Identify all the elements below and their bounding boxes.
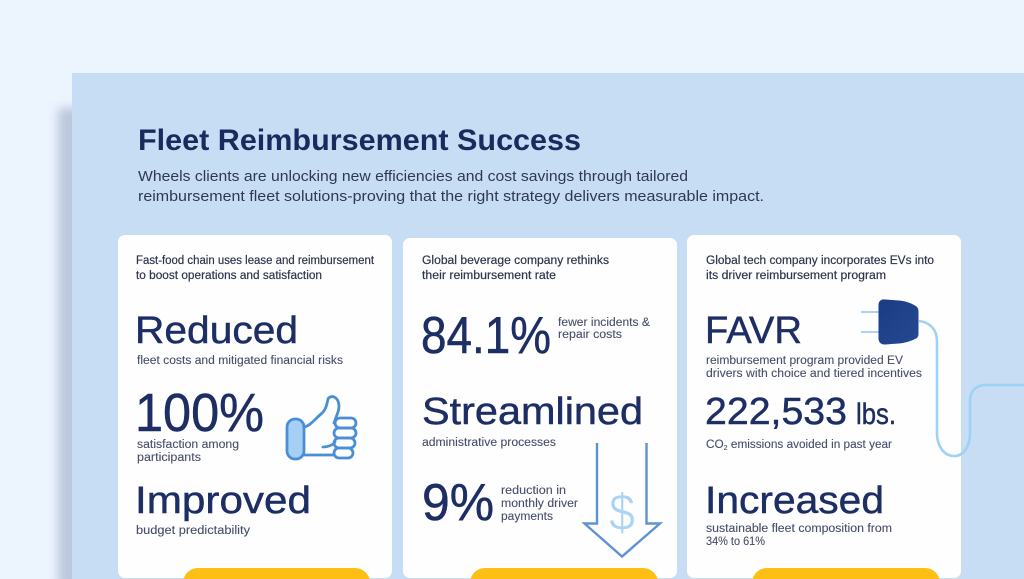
stat: 9%: monthly driver <box>501 498 578 510</box>
stat: improved <box>135 480 311 537</box>
stat: 9%: payments <box>501 511 553 523</box>
stat: streamlined: Streamlined <box>422 391 643 433</box>
stat: 84.1%: fewer incidents & <box>558 317 650 329</box>
stat: FAVR: FAVR <box>705 310 802 352</box>
yellow button <box>752 568 940 579</box>
card heading: its driver reimbursement program <box>706 270 886 282</box>
stat: improved: budget predictability <box>136 525 250 537</box>
icon: down arrow with dollar sign: $ <box>609 484 635 542</box>
title: Fleet Reimbursement Success <box>138 124 581 157</box>
card heading: Global tech company incorporates EVs into <box>706 255 934 267</box>
icon: thumbs up <box>287 397 356 459</box>
yellow button <box>183 568 370 579</box>
stat: reduced: Reduced <box>135 310 298 352</box>
stat: 84.1%: repair costs <box>558 329 622 341</box>
intro text: reimbursement fleet solutions-proving that the right strategy delivers measurable impact. <box>138 188 764 205</box>
stat: 9% <box>422 474 578 532</box>
stat: 222,533 lbs <box>705 391 896 452</box>
stat: 100%: participants <box>137 452 201 464</box>
card heading: their reimbursement rate <box>422 270 556 282</box>
stat: 222,533 lbs: 222,533 <box>705 391 847 433</box>
stat: 222,533 lbs: 2 <box>724 445 728 452</box>
stat: reduced <box>135 310 343 367</box>
intro text: Wheels clients are unlocking new efficiencies and cost savings through tailored <box>138 168 688 185</box>
icon: EV plug and cable <box>861 299 1024 456</box>
card heading: Global beverage company rethinks <box>422 255 609 267</box>
stat: increased: sustainable fleet composition from <box>706 523 892 535</box>
card heading <box>706 255 934 282</box>
stat: streamlined: administrative processes <box>422 437 556 449</box>
panel: fast-food chain case <box>118 235 392 579</box>
stat: increased: 34% to 61% <box>706 536 765 548</box>
stat: reduced: fleet costs and mitigated financial risks <box>137 355 343 367</box>
stat: 9%: 9% <box>422 474 494 532</box>
yellow button <box>470 568 658 579</box>
stat: FAVR <box>705 310 922 380</box>
stat: streamlined <box>422 391 643 449</box>
icon: down arrow with dollar sign <box>584 443 660 556</box>
card heading: Fast-food chain uses lease and reimbursement <box>136 255 375 267</box>
stat: increased <box>705 480 892 548</box>
stat: 84.1%: 84.1% <box>421 307 551 365</box>
stat: FAVR: reimbursement program provided EV <box>706 355 903 367</box>
stat: 222,533 lbs: CO <box>706 439 723 451</box>
panel: global beverage case <box>403 238 677 579</box>
stat: improved: Improved <box>135 480 311 522</box>
stat: 100%: satisfaction among <box>137 439 239 451</box>
card heading: to boost operations and satisfaction <box>136 270 322 282</box>
card heading <box>422 255 609 282</box>
stat: FAVR: drivers with choice and tiered incentives <box>706 368 922 380</box>
stat: increased: Increased <box>705 480 884 522</box>
stat: 100%: 100% <box>135 383 264 443</box>
card heading <box>136 255 375 282</box>
stat: 84.1% <box>421 307 650 365</box>
panel: global tech case <box>687 235 961 579</box>
panel shadow <box>58 108 98 579</box>
stat: 222,533 lbs: lbs. <box>856 398 896 431</box>
stat: 9%: reduction in <box>501 485 566 497</box>
intro text <box>138 168 764 205</box>
stat: 222,533 lbs: emissions avoided in past year <box>728 439 892 451</box>
